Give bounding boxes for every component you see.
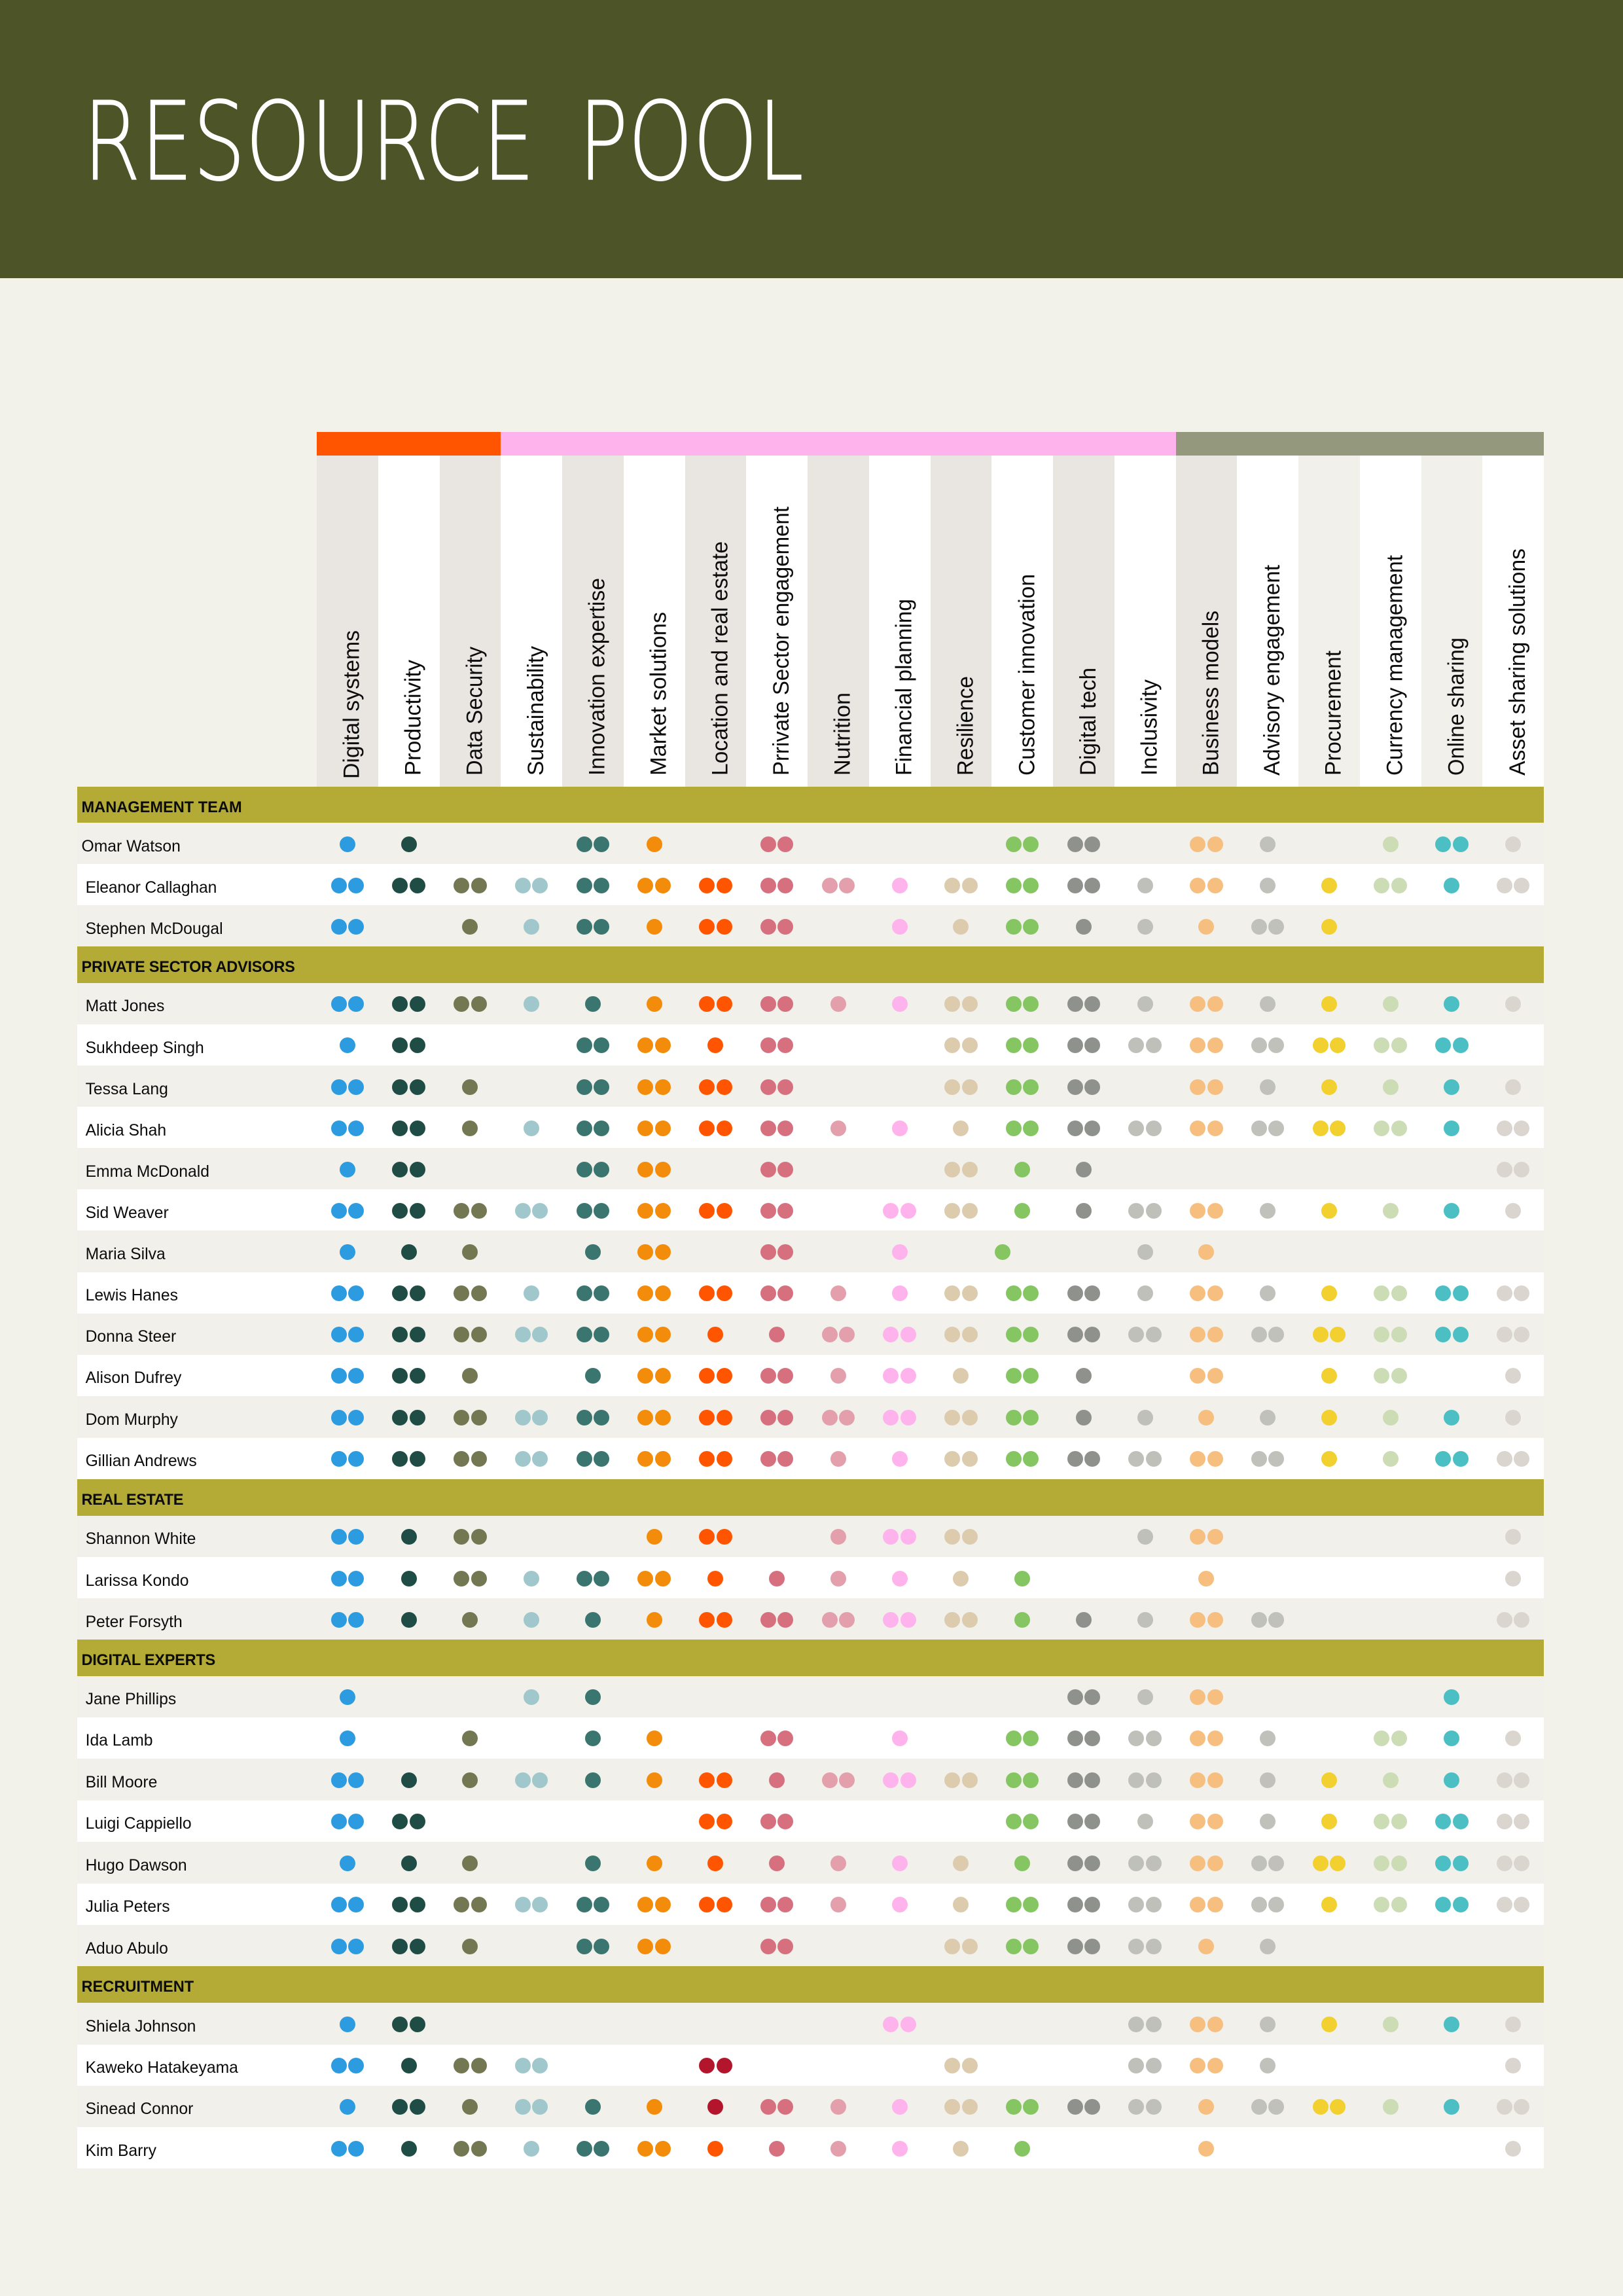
row: Dom Murphy — [77, 1396, 1544, 1437]
row: Ida Lamb — [77, 1717, 1544, 1759]
row: Larissa Kondo: Larissa Kondo — [86, 1572, 188, 1590]
row: Shannon White — [77, 1516, 1544, 1557]
group heading: private sector advisors: PRIVATE SECTOR ADVISORS — [81, 959, 295, 976]
row: Shannon White: Shannon White — [86, 1530, 196, 1548]
row: Alicia Shah: Alicia Shah — [86, 1122, 166, 1139]
row: Kaweko Hatakeyama — [77, 2045, 1544, 2086]
column headings: Innovation expertise — [585, 578, 610, 776]
row: Matt Jones: Matt Jones — [86, 997, 164, 1015]
group heading: real estate: REAL ESTATE — [81, 1492, 183, 1509]
row: Luigi Cappiello: Luigi Cappiello — [86, 1815, 192, 1833]
row: Lewis Hanes — [77, 1272, 1544, 1314]
column headings: Digital systems — [339, 630, 364, 779]
row: Dom Murphy: Dom Murphy — [86, 1411, 178, 1429]
group heading: real estate — [77, 1479, 1544, 1516]
column headings: Sustainability — [524, 646, 548, 776]
row: Aduo Abulo: Aduo Abulo — [86, 1940, 168, 1958]
row: Lewis Hanes: Lewis Hanes — [86, 1287, 178, 1304]
column headings: Advisory engagement — [1260, 564, 1285, 776]
row: Tessa Lang: Tessa Lang — [86, 1081, 168, 1098]
row: Sid Weaver — [77, 1189, 1544, 1230]
row: Stephen McDougal — [77, 905, 1544, 946]
row: Sid Weaver: Sid Weaver — [86, 1204, 169, 1222]
row: Kaweko Hatakeyama: Kaweko Hatakeyama — [86, 2059, 238, 2077]
row: Stephen McDougal: Stephen McDougal — [86, 920, 223, 938]
row: Sinead Connor: Sinead Connor — [86, 2100, 193, 2118]
group heading: private sector advisors — [77, 946, 1544, 983]
row: Larissa Kondo — [77, 1557, 1544, 1598]
group heading: management team: MANAGEMENT TEAM — [81, 799, 242, 816]
column headings: Data Security — [462, 647, 487, 776]
row: Peter Forsyth — [77, 1598, 1544, 1640]
row: Julia Peters — [77, 1884, 1544, 1925]
column headings: Market solutions — [647, 612, 671, 776]
row: Alicia Shah — [77, 1107, 1544, 1148]
row: Maria Silva: Maria Silva — [86, 1246, 166, 1263]
row: Emma McDonald — [77, 1148, 1544, 1189]
row: Peter Forsyth: Peter Forsyth — [86, 1613, 183, 1631]
row: Alison Dufrey — [77, 1355, 1544, 1396]
title: POOL — [579, 79, 804, 206]
row: Gillian Andrews — [77, 1438, 1544, 1479]
row: Kim Barry: Kim Barry — [86, 2142, 156, 2160]
column headings: Financial planning — [891, 599, 916, 776]
row: Omar Watson — [77, 823, 1544, 864]
row: Eleanor Callaghan: Eleanor Callaghan — [86, 879, 217, 897]
row: Ida Lamb: Ida Lamb — [86, 1732, 153, 1749]
row: Shiela Johnson — [77, 2003, 1544, 2044]
column headings: Online sharing — [1444, 637, 1469, 776]
column headings: Resilience — [953, 676, 978, 776]
row: Gillian Andrews: Gillian Andrews — [86, 1452, 197, 1470]
column headings: Nutrition — [830, 692, 855, 776]
row: Alison Dufrey: Alison Dufrey — [86, 1369, 181, 1387]
row: Aduo Abulo — [77, 1925, 1544, 1966]
row: Sukhdeep Singh: Sukhdeep Singh — [86, 1039, 204, 1057]
column headings: Location and real estate — [708, 541, 733, 776]
category bar: pink — [501, 432, 1175, 456]
column headings: Currency management — [1382, 554, 1407, 776]
group heading: recruitment: RECRUITMENT — [81, 1979, 194, 1996]
row: Matt Jones — [77, 983, 1544, 1024]
row: Hugo Dawson — [77, 1842, 1544, 1883]
row: Donna Steer: Donna Steer — [86, 1328, 176, 1346]
column headings: Productivity — [401, 660, 425, 776]
row: Donna Steer — [77, 1314, 1544, 1355]
group heading: digital experts — [77, 1640, 1544, 1676]
column headings: Customer innovation — [1014, 574, 1039, 776]
row: Hugo Dawson: Hugo Dawson — [86, 1857, 187, 1874]
row: Eleanor Callaghan — [77, 864, 1544, 905]
column headings: Digital tech — [1076, 668, 1101, 776]
title: RESOURCE — [83, 79, 535, 206]
column headings: Procurement — [1321, 650, 1346, 776]
row: Bill Moore — [77, 1759, 1544, 1800]
column headings: Business models — [1199, 611, 1224, 776]
row: Omar Watson: Omar Watson — [81, 838, 181, 855]
column backgrounds — [317, 456, 1544, 787]
column headings: Inclusivity — [1137, 679, 1162, 776]
row: Luigi Cappiello — [77, 1800, 1544, 1842]
column headings — [339, 506, 1530, 779]
group heading: management team — [77, 787, 1544, 823]
row: Jane Phillips: Jane Phillips — [86, 1691, 176, 1708]
column headings: Prrivate Sector engagement — [769, 506, 794, 776]
row: Shiela Johnson: Shiela Johnson — [86, 2018, 196, 2036]
row: Bill Moore: Bill Moore — [86, 1774, 157, 1791]
row: Tessa Lang — [77, 1066, 1544, 1107]
row: Kim Barry — [77, 2127, 1544, 2168]
row: Jane Phillips — [77, 1676, 1544, 1717]
header banner — [0, 0, 1623, 278]
column headings: Asset sharing solutions — [1505, 548, 1530, 776]
row: Sukhdeep Singh — [77, 1024, 1544, 1066]
row: Sinead Connor — [77, 2086, 1544, 2127]
row: Maria Silva — [77, 1230, 1544, 1272]
category bar: orange — [317, 432, 501, 456]
group heading: digital experts: DIGITAL EXPERTS — [81, 1652, 215, 1669]
category bar: grey-green — [1175, 432, 1544, 456]
row: Julia Peters: Julia Peters — [86, 1898, 170, 1916]
row: Emma McDonald: Emma McDonald — [86, 1163, 209, 1181]
group heading: recruitment — [77, 1966, 1544, 2003]
